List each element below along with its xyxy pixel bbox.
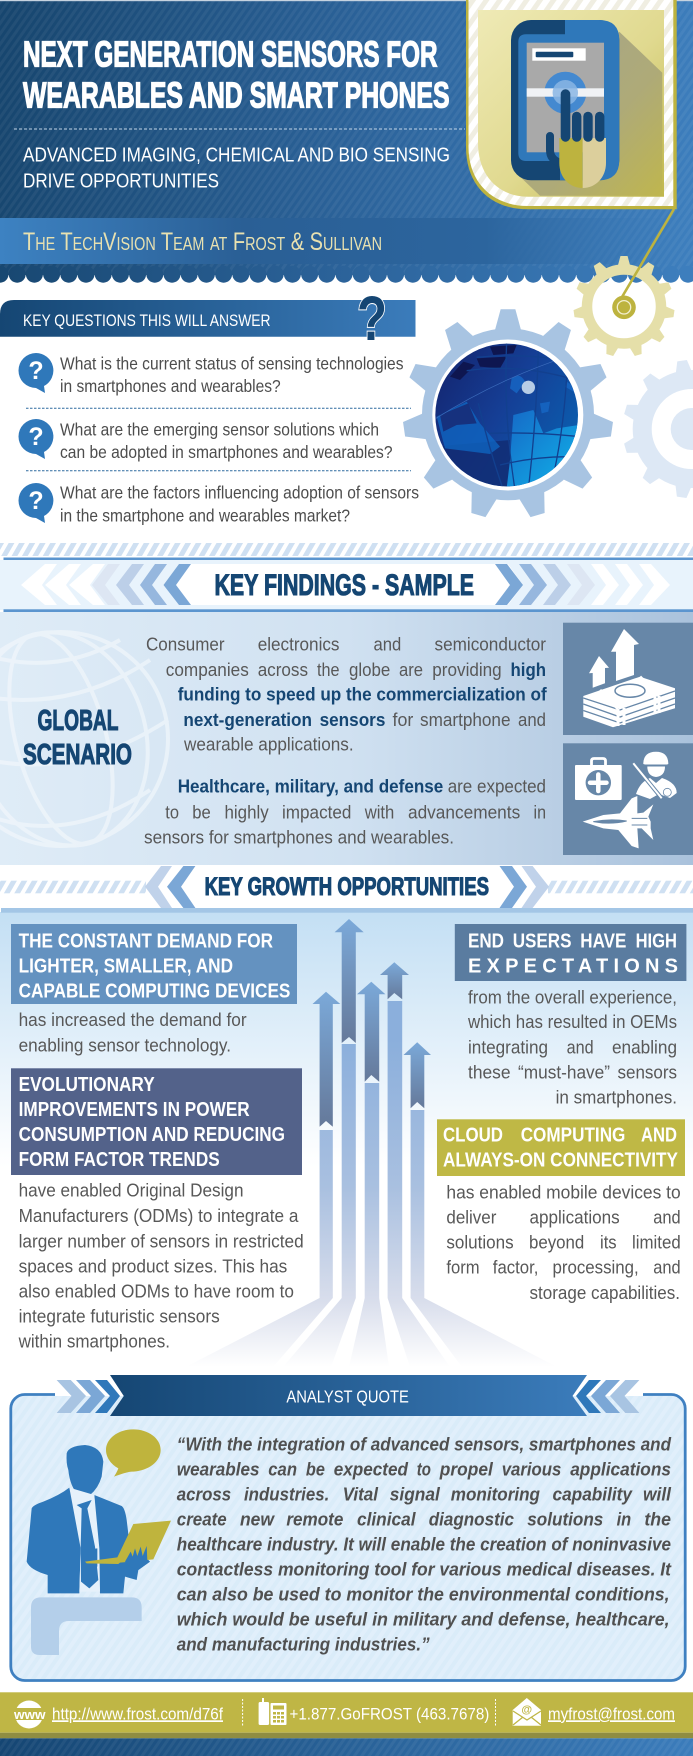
key growth heading [0, 866, 693, 908]
header banner [0, 0, 693, 278]
text block: funding: are [399, 660, 423, 680]
text block: healthcare: sensors for smartphones and wearables. [144, 827, 454, 847]
gear: pale right [613, 351, 693, 507]
subtitle: DRIVE OPPORTUNITIES [23, 170, 219, 192]
text block: healthcare: impacted [282, 802, 351, 822]
quote text: propel [439, 1460, 494, 1480]
opportunity 4: applications [530, 1207, 620, 1227]
opportunity 3: these [468, 1062, 510, 1082]
heading box: CAPABLE COMPUTING DEVICES [19, 981, 290, 1003]
heading box: HAVE [580, 930, 626, 952]
text block: healthcare: with [364, 802, 394, 822]
quote text: in [617, 1510, 631, 1530]
opportunity 2: Manufacturers (ODMs) to integrate a [19, 1206, 299, 1226]
quote text: and manufacturing industries.” [177, 1635, 430, 1655]
quote text: monitoring [451, 1485, 540, 1505]
quote text: can also be used to monitor the environmental conditions, [177, 1585, 670, 1605]
quote text: remote [286, 1510, 343, 1530]
question 3 [19, 483, 419, 525]
opportunity 3: in smartphones. [556, 1087, 677, 1107]
opportunity 1: has increased the demand for [19, 1010, 247, 1030]
gear with globe [402, 309, 614, 519]
text block: healthcare: Healthcare, military, and defense [178, 777, 443, 797]
opportunity 4: factor, [493, 1257, 538, 1277]
podium [31, 1597, 142, 1655]
footer [0, 1692, 693, 1756]
icon: medical bag [575, 758, 622, 800]
key questions heading: KEY QUESTIONS THIS WILL ANSWER [23, 312, 271, 330]
text block: funding: semiconductor [434, 635, 546, 655]
right chevrons [495, 564, 670, 605]
icon: money stack [583, 677, 675, 727]
arrow 4 [380, 962, 450, 1367]
opportunity 4: solutions [446, 1232, 514, 1252]
opportunity 3: integrating [468, 1037, 548, 1057]
text block: funding: for [392, 710, 413, 730]
heading: global scenario: GLOBAL [38, 705, 118, 737]
opportunity 2: larger number of sensors in restricted [19, 1231, 304, 1251]
email link: myfrost@frost.com [548, 1704, 675, 1723]
question 1 [19, 353, 404, 396]
opportunity 4: its [600, 1232, 617, 1252]
quote text: various [502, 1460, 561, 1480]
key growth heading: KEY GROWTH OPPORTUNITIES [205, 873, 489, 901]
question 3: ? [28, 487, 44, 515]
heading box: EXPECTATIONS [468, 956, 678, 978]
question 1: in smartphones and wearables? [60, 376, 281, 396]
icon: soldier [633, 752, 677, 799]
text block: healthcare: be [192, 802, 211, 822]
heading box [11, 924, 297, 1004]
heading box [437, 1119, 685, 1176]
quote text [177, 1435, 672, 1655]
icon: email envelope [513, 1698, 541, 1726]
opportunity 4: has enabled mobile devices to [446, 1182, 681, 1202]
quote text: new [240, 1510, 275, 1530]
key findings heading: KEY FINDINGS - SAMPLE [214, 569, 474, 602]
text block: funding: across [258, 660, 308, 680]
quote text: signal [390, 1485, 441, 1505]
heading box: USERS [513, 930, 572, 952]
quote banner: ANALYST QUOTE [286, 1387, 409, 1407]
quote text: applications [570, 1460, 671, 1480]
text block: healthcare: are expected [448, 777, 546, 797]
left chevrons [21, 564, 191, 605]
heading box: IMPROVEMENTS IN POWER [19, 1099, 250, 1121]
heading: global scenario: SCENARIO [23, 739, 132, 771]
website link: http://www.frost.com/d76f [52, 1704, 223, 1723]
icon: large question mark: ? [357, 284, 387, 354]
heading: global scenario [23, 705, 132, 771]
heading box: HIGH [636, 930, 677, 952]
opportunity 4: processing, [552, 1257, 639, 1277]
opportunity 3: sensors [618, 1062, 677, 1082]
text block: funding: companies [166, 660, 249, 680]
text block: healthcare: in [534, 802, 546, 822]
question 2: can be adopted in smartphones and wearables? [60, 442, 393, 462]
opportunity 4: beyond [529, 1232, 584, 1252]
question 1: What is the current status of sensing technologies [60, 353, 404, 373]
icon: growth arrows [589, 629, 639, 688]
quote text: healthcare industry. It will enable the creation of noninvasive [177, 1535, 671, 1555]
opportunity 4 [437, 1119, 685, 1303]
quote text: wearables [177, 1460, 260, 1480]
quote text: clinical [357, 1510, 416, 1530]
heading box: CONSUMPTION AND REDUCING [19, 1124, 285, 1146]
text block: healthcare: to [165, 802, 179, 822]
text block: funding: providing [432, 660, 502, 680]
heading box: EVOLUTIONARY [19, 1074, 155, 1096]
text block: healthcare [144, 777, 546, 847]
opportunity 3 [455, 924, 686, 1107]
text block: funding: sensors [320, 710, 385, 730]
opportunity 4: and [653, 1257, 681, 1277]
opportunity 4: limited [632, 1232, 681, 1252]
icon: email envelope: @ [521, 1704, 532, 1716]
quote text: contactless monitoring tool for various medical diseases. It [177, 1560, 672, 1580]
quote text: capability [552, 1485, 633, 1505]
connector line to gear [612, 209, 674, 319]
title: WEARABLES AND SMART PHONES [23, 74, 450, 115]
opportunity 2: within smartphones. [18, 1332, 170, 1352]
growth arrows [186, 919, 557, 1367]
opportunity 1 [11, 924, 297, 1056]
gear: gold [573, 256, 675, 357]
globe watermark [0, 630, 170, 848]
heading box: AND [641, 1125, 677, 1147]
icon panel: money and arrows [563, 623, 693, 735]
key findings heading [0, 558, 693, 612]
question 2: ? [28, 423, 44, 451]
panel: growth opportunities background [0, 908, 693, 1167]
opportunity 3: “must-have” [518, 1062, 610, 1082]
author band [0, 218, 693, 264]
opportunity 2 [11, 1068, 304, 1352]
question 2 [19, 419, 393, 462]
quote text: diagnostic [429, 1510, 514, 1530]
icon: hand [550, 89, 607, 188]
panel: global scenario [0, 612, 693, 865]
arrow 1 [186, 992, 340, 1367]
icon: telephone [259, 1698, 286, 1725]
text block: funding: and [518, 710, 546, 730]
phone number: +1.877.GoFROST (463.7678) [290, 1704, 489, 1723]
quote text: will [643, 1485, 672, 1505]
icon: phone shadow [513, 32, 662, 196]
text block: funding: wearable applications. [183, 735, 354, 755]
question 1: ? [28, 357, 44, 385]
quote text: expected [334, 1460, 409, 1480]
text block: funding [146, 635, 548, 755]
icon: www globe: www [13, 1707, 46, 1722]
text block: funding: high [510, 660, 546, 680]
heading box: COMPUTING [521, 1125, 625, 1147]
quote text: can [268, 1460, 297, 1480]
quote text: Vital [343, 1485, 379, 1505]
text block: funding: funding to speed up the commercialization of [178, 685, 548, 705]
text block: funding: electronics [258, 635, 340, 655]
quote text: industries. [244, 1485, 329, 1505]
heading box [455, 924, 686, 981]
heading box: LIGHTER, SMALLER, AND [19, 956, 233, 978]
quote banner [57, 1375, 639, 1416]
arrow 5 [404, 1042, 557, 1367]
badge with phone icon [466, 0, 677, 209]
opportunity 4: storage capabilities. [530, 1283, 680, 1303]
opportunity 2: integrate futuristic sensors [19, 1307, 220, 1327]
key questions heading [0, 284, 416, 354]
opportunity 3: which has resulted in OEMs [467, 1012, 677, 1032]
author band: The TechVision Team at Frost & Sullivan [23, 228, 382, 256]
panel: analyst quote [11, 1375, 685, 1680]
quote text: which would be useful in military and defense, healthcare, [177, 1610, 670, 1630]
quote text: “With the integration of advanced sensors, smartphones and [177, 1435, 672, 1455]
text block: funding: globe [349, 660, 390, 680]
opportunity 3: from the overall experience, [468, 987, 677, 1007]
icon: fighter jet [583, 796, 653, 848]
icon: globe [433, 342, 582, 490]
text block: healthcare: highly [224, 802, 269, 822]
opportunity 4: and [653, 1207, 681, 1227]
question 3: What are the factors influencing adoption of sensors [60, 483, 419, 503]
question 2: What are the emerging sensor solutions which [60, 419, 379, 439]
quote text: across [177, 1485, 231, 1505]
quote text: be [306, 1460, 325, 1480]
icon: analyst at podium [27, 1429, 171, 1655]
text block: funding: next-generation [183, 710, 312, 730]
text block: funding: and [374, 635, 401, 655]
quote text: create [177, 1510, 227, 1530]
opportunity 4: form [446, 1257, 480, 1277]
quote text: the [644, 1510, 671, 1530]
icon panel: healthcare, military, defense [563, 743, 693, 855]
icon: www globe [13, 1700, 46, 1728]
opportunity 1: enabling sensor technology. [19, 1036, 231, 1056]
text block: funding: Consumer [146, 635, 225, 655]
laptop [85, 1521, 171, 1570]
opportunity 4: deliver [446, 1207, 496, 1227]
subtitle [23, 145, 450, 192]
heading box [11, 1068, 302, 1175]
title [23, 34, 450, 115]
heading box: CLOUD [443, 1125, 503, 1147]
text block: funding: smartphone [420, 710, 510, 730]
arrow 3 [349, 982, 389, 1367]
opportunity 3: and [567, 1037, 594, 1057]
speech bubble [106, 1429, 161, 1477]
arrow 2 [283, 919, 364, 1367]
subtitle: ADVANCED IMAGING, CHEMICAL AND BIO SENSING [23, 145, 450, 167]
title: NEXT GENERATION SENSORS FOR [23, 34, 438, 75]
opportunity 2: spaces and product sizes. This has [19, 1256, 287, 1276]
quote text: to [417, 1460, 431, 1480]
heading box: END [468, 930, 504, 952]
opportunity 3: enabling [612, 1037, 677, 1057]
text block: healthcare: advancements [408, 802, 520, 822]
text block: funding: the [317, 660, 340, 680]
opportunity 2: have enabled Original Design [19, 1181, 243, 1201]
icon: smartphone [511, 20, 619, 180]
opportunity 2: also enabled ODMs to have room to [19, 1281, 294, 1301]
quote text: solutions [527, 1510, 603, 1530]
heading box: FORM FACTOR TRENDS [19, 1149, 220, 1171]
person [27, 1445, 150, 1593]
question 3: in the smartphone and wearables market? [60, 505, 350, 525]
heading box: THE CONSTANT DEMAND FOR [19, 930, 273, 952]
